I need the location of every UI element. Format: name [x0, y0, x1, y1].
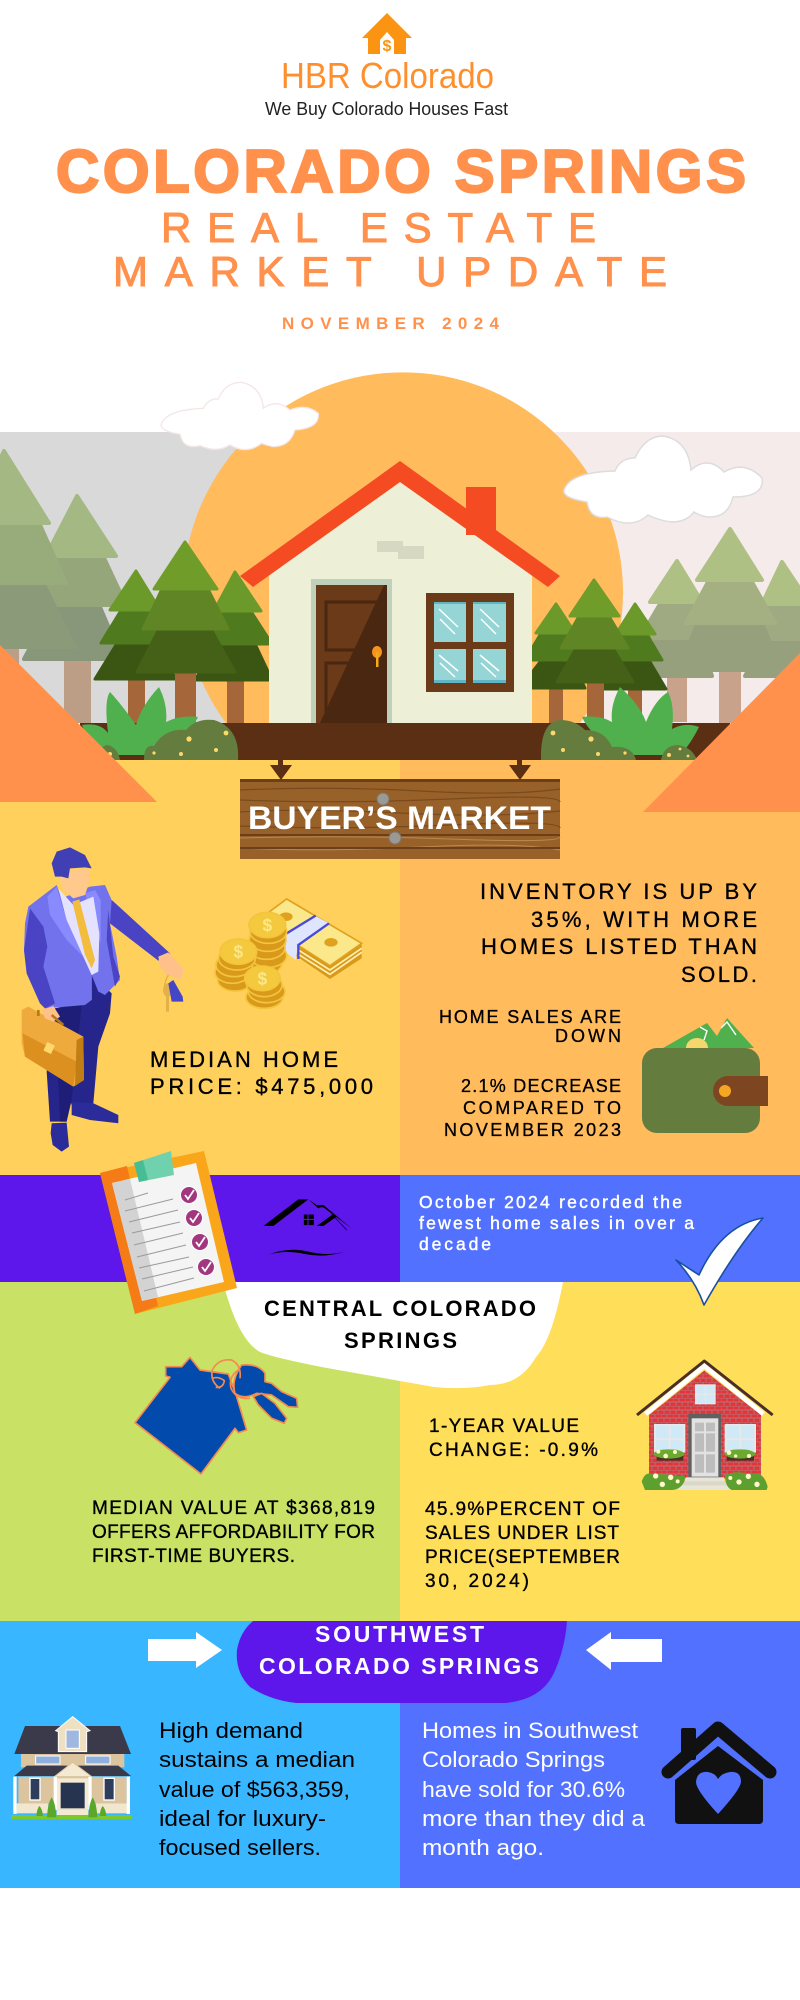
sign nails: [377, 793, 401, 844]
lower roof: [14, 1766, 131, 1776]
text: central left stat: MEDIAN VALUE AT $368,819: [92, 1498, 375, 1519]
icon: house roof logo: [263, 1199, 352, 1256]
bush left: [97, 720, 238, 760]
text: inventory: HOMES LISTED THAN: [481, 934, 757, 959]
shirt: [58, 888, 99, 975]
trees: front left: [95, 542, 272, 723]
text: central left stat: [92, 1498, 375, 1567]
panel: blue band: [400, 1175, 800, 1282]
heading: central colorado springs: CENTRAL COLORADO: [264, 1296, 536, 1321]
upper roof: [14, 1726, 131, 1754]
door frame: [57, 1778, 88, 1809]
porch platform: [80, 723, 730, 760]
text: homes sold: month ago.: [422, 1835, 544, 1860]
text: decrease: [444, 1076, 621, 1140]
steps: [678, 1477, 732, 1490]
briefcase: [22, 1006, 84, 1087]
plant right: [582, 687, 699, 755]
cloud right: [564, 436, 762, 523]
wall: [269, 482, 532, 723]
text: sales under list: SALES UNDER LIST: [425, 1523, 619, 1544]
bush berries: [108, 731, 689, 757]
porch gable: [54, 1762, 92, 1777]
arrow right-pointing: [148, 1632, 222, 1668]
sun: [183, 372, 623, 723]
heading blob: central: [223, 1282, 563, 1388]
text: central left stat: FIRST-TIME BUYERS.: [92, 1546, 295, 1567]
keys: [234, 1365, 298, 1423]
lower wall: [18, 1777, 127, 1803]
text: median home price: PRICE: $475,000: [150, 1074, 373, 1099]
text: value change: [429, 1416, 598, 1461]
heading: southwest colorado springs: COLORADO SPRINGS: [259, 1653, 539, 1679]
panel: southwest right: [400, 1621, 800, 1888]
corner triangle left: [0, 645, 157, 802]
sign arrow right: [509, 760, 531, 780]
panel: yellow buyer's market backgrounds: [0, 760, 800, 1175]
icon: orange house with dollar sign: [362, 13, 412, 55]
cash bundle: [258, 899, 362, 979]
heading blob: southwest: [237, 1621, 567, 1703]
text: high demand: sustains a median: [159, 1747, 355, 1772]
hair: [52, 847, 92, 878]
text: sales under list: [425, 1499, 620, 1592]
jacket dark sleeves: [24, 900, 170, 1008]
icon: luxury house: [11, 1717, 132, 1819]
icon: clipboard: [100, 1151, 237, 1314]
coin symbols: [234, 915, 273, 988]
text: high demand: ideal for luxury-: [159, 1806, 326, 1831]
subtitle line 1: REAL ESTATE: [161, 204, 596, 251]
door: [311, 579, 392, 723]
upper wall: [21, 1754, 124, 1767]
heading: southwest colorado springs: SOUTHWEST: [315, 1621, 484, 1647]
coin symbols: $: [263, 915, 273, 935]
panel: central left: [0, 1282, 400, 1621]
text: high demand: [159, 1718, 355, 1860]
roof: [240, 461, 560, 587]
heading: central colorado springs: [264, 1296, 536, 1353]
text: homes sold: more than they did a: [422, 1806, 646, 1831]
coin stack back: [245, 912, 287, 975]
trees: front right: [520, 580, 666, 723]
icon: big check mark: [676, 1218, 763, 1305]
coin symbols: $: [258, 968, 268, 988]
panel: purple band: [0, 1175, 400, 1282]
posts: [13, 1777, 130, 1814]
tie: [72, 899, 95, 968]
face: [60, 868, 90, 898]
header: logo: [265, 13, 508, 119]
house tag: [135, 1357, 247, 1474]
heading: southwest colorado springs: [259, 1621, 539, 1679]
trousers: [47, 973, 112, 1122]
text: high demand: value of $563,359,: [159, 1777, 350, 1802]
text: october 2024 fewest sales: [419, 1192, 694, 1254]
text: sales under list: 30, 2024): [425, 1571, 529, 1592]
text: sales under list: 45.9%PERCENT OF: [425, 1499, 620, 1520]
text: decrease: COMPARED TO: [463, 1098, 621, 1118]
text: homes sold: Colorado Springs: [422, 1747, 605, 1772]
jacket: [24, 885, 170, 1008]
text: homes sold: have sold for 30.6%: [422, 1777, 625, 1802]
bush right: [541, 720, 697, 760]
cloud left: [161, 382, 318, 450]
heading: central colorado springs: SPRINGS: [344, 1328, 457, 1353]
wooden sign: [240, 779, 560, 859]
text: october 2024 fewest sales: decade: [419, 1234, 491, 1254]
shrubs: [36, 1797, 106, 1817]
sign text: BUYER’S MARKET: [248, 800, 551, 836]
text: inventory: SOLD.: [681, 962, 757, 987]
text: home sales down: [439, 1007, 621, 1046]
title block: [56, 138, 746, 333]
arrow left-pointing: [586, 1632, 662, 1670]
coin symbols: $: [234, 942, 244, 962]
text: inventory: INVENTORY IS UP BY: [480, 879, 757, 904]
icon: house tag with keys: [135, 1357, 298, 1474]
text: home sales down: HOME SALES ARE: [439, 1007, 621, 1027]
text: value change: 1-YEAR VALUE: [429, 1416, 579, 1437]
text: value change: CHANGE: -0.9%: [429, 1440, 598, 1461]
icon: cash and coins: [215, 899, 362, 1008]
corner triangle right: [643, 653, 800, 812]
subtitle line 2: MARKET UPDATE: [113, 248, 667, 295]
text: home sales down: DOWN: [555, 1026, 621, 1046]
text: median home price: MEDIAN HOME: [150, 1047, 338, 1072]
panel: hero scene: [0, 372, 800, 760]
brick walls: [649, 1371, 761, 1478]
windows: [30, 1778, 114, 1800]
icon: businessman holding keys: [22, 847, 183, 1152]
text: inventory: [480, 879, 757, 987]
sky background: [0, 432, 800, 723]
text: decrease: NOVEMBER 2023: [444, 1120, 621, 1140]
double doors: [61, 1783, 85, 1808]
panel: central right: [400, 1282, 800, 1621]
text: median home price: [150, 1047, 373, 1099]
windows: [655, 1425, 755, 1452]
text: high demand: High demand: [159, 1718, 303, 1743]
base step: [57, 1809, 88, 1816]
window: [426, 593, 514, 692]
text: decrease: 2.1% DECREASE: [461, 1076, 621, 1096]
icon: orange house with dollar sign: $: [383, 38, 392, 55]
text: october 2024 fewest sales: fewest home sales in over a: [419, 1213, 694, 1233]
date: NOVEMBER 2024: [282, 314, 500, 333]
plant left: [82, 687, 198, 755]
door: [688, 1414, 721, 1477]
title: city: COLORADO SPRINGS: [56, 138, 746, 205]
trees: far right: [640, 529, 800, 723]
text: october 2024 fewest sales: October 2024 recorded the: [419, 1192, 682, 1212]
hand with keys: [158, 952, 183, 1012]
text: homes sold: [422, 1718, 646, 1860]
chimney: [466, 487, 496, 535]
icon: wallet: [642, 1018, 768, 1133]
clipboard lines: [125, 1193, 194, 1291]
trouser shading: [55, 1005, 82, 1122]
text: sales under list: PRICE(SEPTEMBER: [425, 1547, 620, 1568]
key rings: [212, 1360, 250, 1399]
icon: red brick house: [637, 1361, 773, 1490]
sign arrow left: [270, 760, 292, 780]
logo wordmark: HBR Colorado: [281, 55, 494, 96]
text: central left stat: OFFERS AFFORDABILITY FOR: [92, 1522, 375, 1543]
shrubs: [642, 1472, 768, 1490]
panel: southwest left: [0, 1621, 400, 1888]
house: [240, 461, 560, 723]
logo tagline: We Buy Colorado Houses Fast: [265, 99, 508, 119]
lattice: [17, 1803, 128, 1813]
dormer: [56, 1717, 90, 1752]
trees: far left: [0, 451, 126, 723]
icon: house with heart: [668, 1728, 770, 1824]
grass: [11, 1815, 132, 1819]
shoes: [51, 1102, 118, 1152]
jacket lapels: [47, 887, 101, 963]
roof: [646, 1366, 763, 1414]
clipboard checks: [180, 1186, 214, 1276]
coin stack front: [245, 966, 285, 1008]
planters: [654, 1449, 755, 1461]
text: inventory: 35%, WITH MORE: [531, 907, 757, 932]
text: high demand: focused sellers.: [159, 1835, 321, 1860]
wall bricks: [377, 541, 424, 559]
upper windows: [36, 1756, 110, 1764]
gable window: [696, 1385, 715, 1404]
coin stack left: [215, 939, 257, 991]
text: homes sold: Homes in Southwest: [422, 1718, 638, 1743]
